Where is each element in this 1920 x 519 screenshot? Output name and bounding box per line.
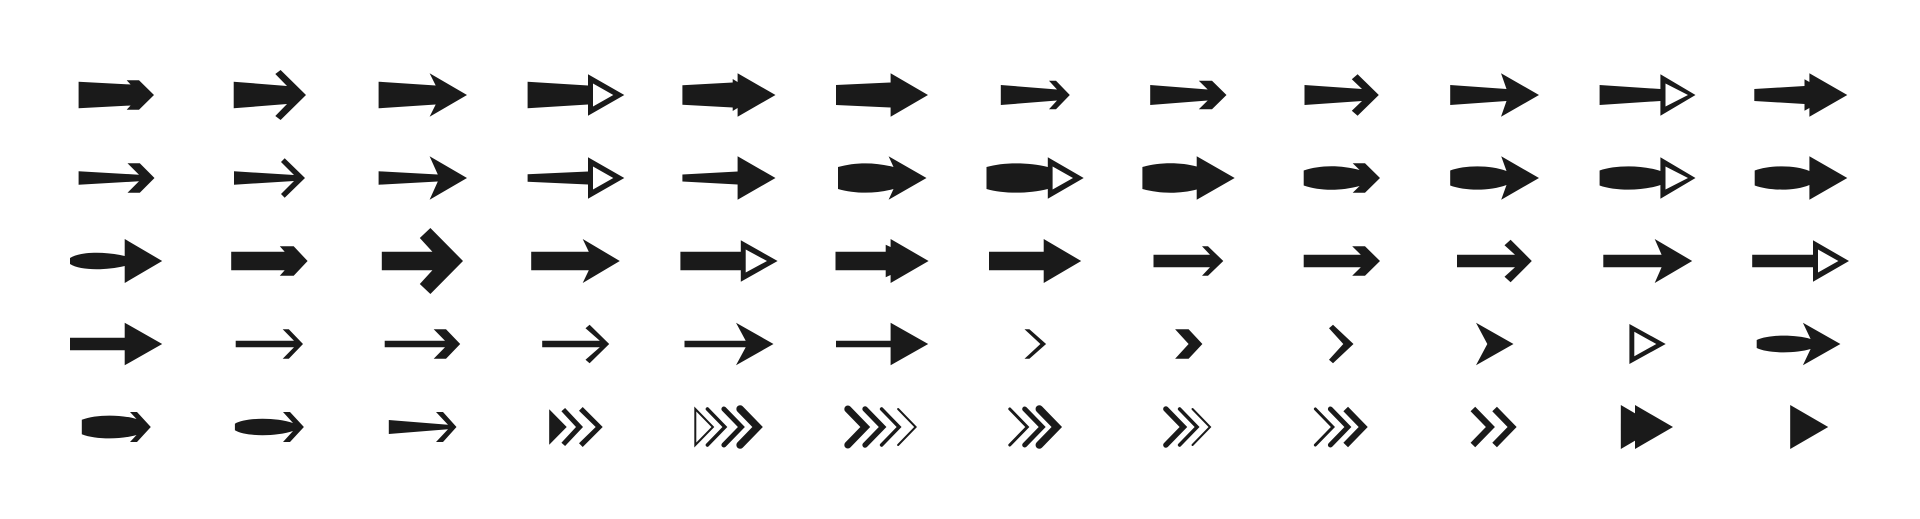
icon: tapered arrow with short block head: [79, 80, 154, 110]
icon: four shrinking chevrons: [848, 409, 916, 445]
icon: triangle with two chevrons: [549, 407, 603, 447]
icon: thin arrow with thin chevron: [236, 329, 303, 359]
icon: thin arrow with triangle head: [836, 323, 928, 365]
icon: tapered arrow with chevron head: [234, 70, 306, 120]
icon: small tapered arrow with thin chevron: [1001, 81, 1070, 109]
icon: flared arrow with triangle head: [836, 73, 928, 117]
icon: narrow bullet arrow with hollow head: [1600, 157, 1696, 199]
icon: arrow with triangle head: [70, 323, 162, 365]
icon: narrow bullet arrow with block head: [1304, 163, 1380, 193]
icon: thick arrow with triangle head: [989, 239, 1081, 283]
icon: thin arrow with block head: [385, 329, 460, 359]
icon: solid triangle: [1790, 405, 1828, 449]
icon: medium arrow with swept head: [1603, 239, 1692, 283]
icon: narrow bullet arrow with triangle head: [1755, 156, 1847, 200]
icon: bullet arrow with thin chevron: [82, 412, 151, 442]
icon: pointed bullet arrow with triangle head: [70, 239, 162, 283]
icon: medium arrow with hollow head: [1752, 240, 1849, 282]
icon: narrow flared arrow with double-step head: [1754, 73, 1847, 117]
icon: thick arrow with double-step head: [836, 239, 929, 283]
icon: flared arrow with double-step head: [682, 73, 776, 117]
icon: medium arrow with chevron head: [1457, 240, 1532, 282]
row 5: mixed arrows and multi-chevrons: [82, 405, 1828, 449]
icon: small tapered arrow with swept head: [1450, 73, 1539, 117]
icon: slim arrow with chevron head: [234, 158, 305, 198]
row 4: thin arrows and single heads: [70, 323, 1840, 365]
icon: slim arrow with swept head: [379, 156, 467, 200]
icon: three shrinking chevrons: [1166, 409, 1210, 445]
icon: thick arrow with large chevron head: [382, 228, 463, 294]
icon: flared slim arrow with hollow head: [528, 157, 624, 199]
icon: small tapered arrow with block head: [1150, 81, 1226, 109]
icon: thick arrow with block head: [231, 246, 308, 276]
icon: double chevron: [1473, 409, 1512, 445]
row 2: slim and bullet-shaft arrows: [79, 156, 1847, 200]
icon: flared slim arrow with triangle head: [682, 156, 776, 200]
icon: hollow triangle with growing chevrons: [695, 409, 758, 445]
icon: thick arrow with hollow head: [680, 240, 778, 282]
icon: medium arrow with block head: [1304, 246, 1380, 276]
icon: three growing square chevrons: [1315, 409, 1363, 445]
icon: thin chevron: [1024, 329, 1046, 359]
icon: thin arrow with chevron head: [542, 325, 609, 363]
icon: tapered arrow with swept head: [379, 73, 467, 117]
icon: hollow triangle: [1629, 324, 1666, 364]
icon: pointed bullet arrow with swept head: [1757, 323, 1840, 365]
icon: small tapered arrow with chevron head: [1304, 74, 1379, 116]
icon: medium arrow with thin chevron: [1154, 246, 1223, 276]
icon: small tapered arrow with hollow head: [1600, 74, 1696, 116]
icon: tapered arrow with thin chevron: [389, 412, 456, 442]
icon: block chevron: [1175, 329, 1202, 359]
row 3: straight-shaft arrows: [70, 228, 1849, 294]
icon: wide bullet arrow with hollow head: [986, 157, 1084, 199]
icon: medium chevron: [1329, 325, 1354, 363]
icon: double triangle fast-forward: [1621, 405, 1673, 449]
icon: wide bullet arrow with swept head: [838, 156, 926, 200]
icon: tapered arrow with hollow head: [528, 74, 624, 116]
icon: slim arrow with block head: [79, 163, 154, 193]
icon: thin arrow with swept head: [684, 323, 774, 365]
icon: swept arrowhead: [1476, 323, 1514, 365]
icon: slim bullet arrow with thin chevron: [235, 412, 304, 442]
icon: narrow bullet arrow with swept head: [1450, 156, 1539, 200]
icon: wide bullet arrow with triangle head: [1142, 156, 1235, 200]
icon: thick arrow with swept head: [531, 239, 620, 283]
row 1: tapered-shaft arrows: [79, 70, 1847, 120]
icon: three growing chevrons: [1010, 409, 1057, 445]
